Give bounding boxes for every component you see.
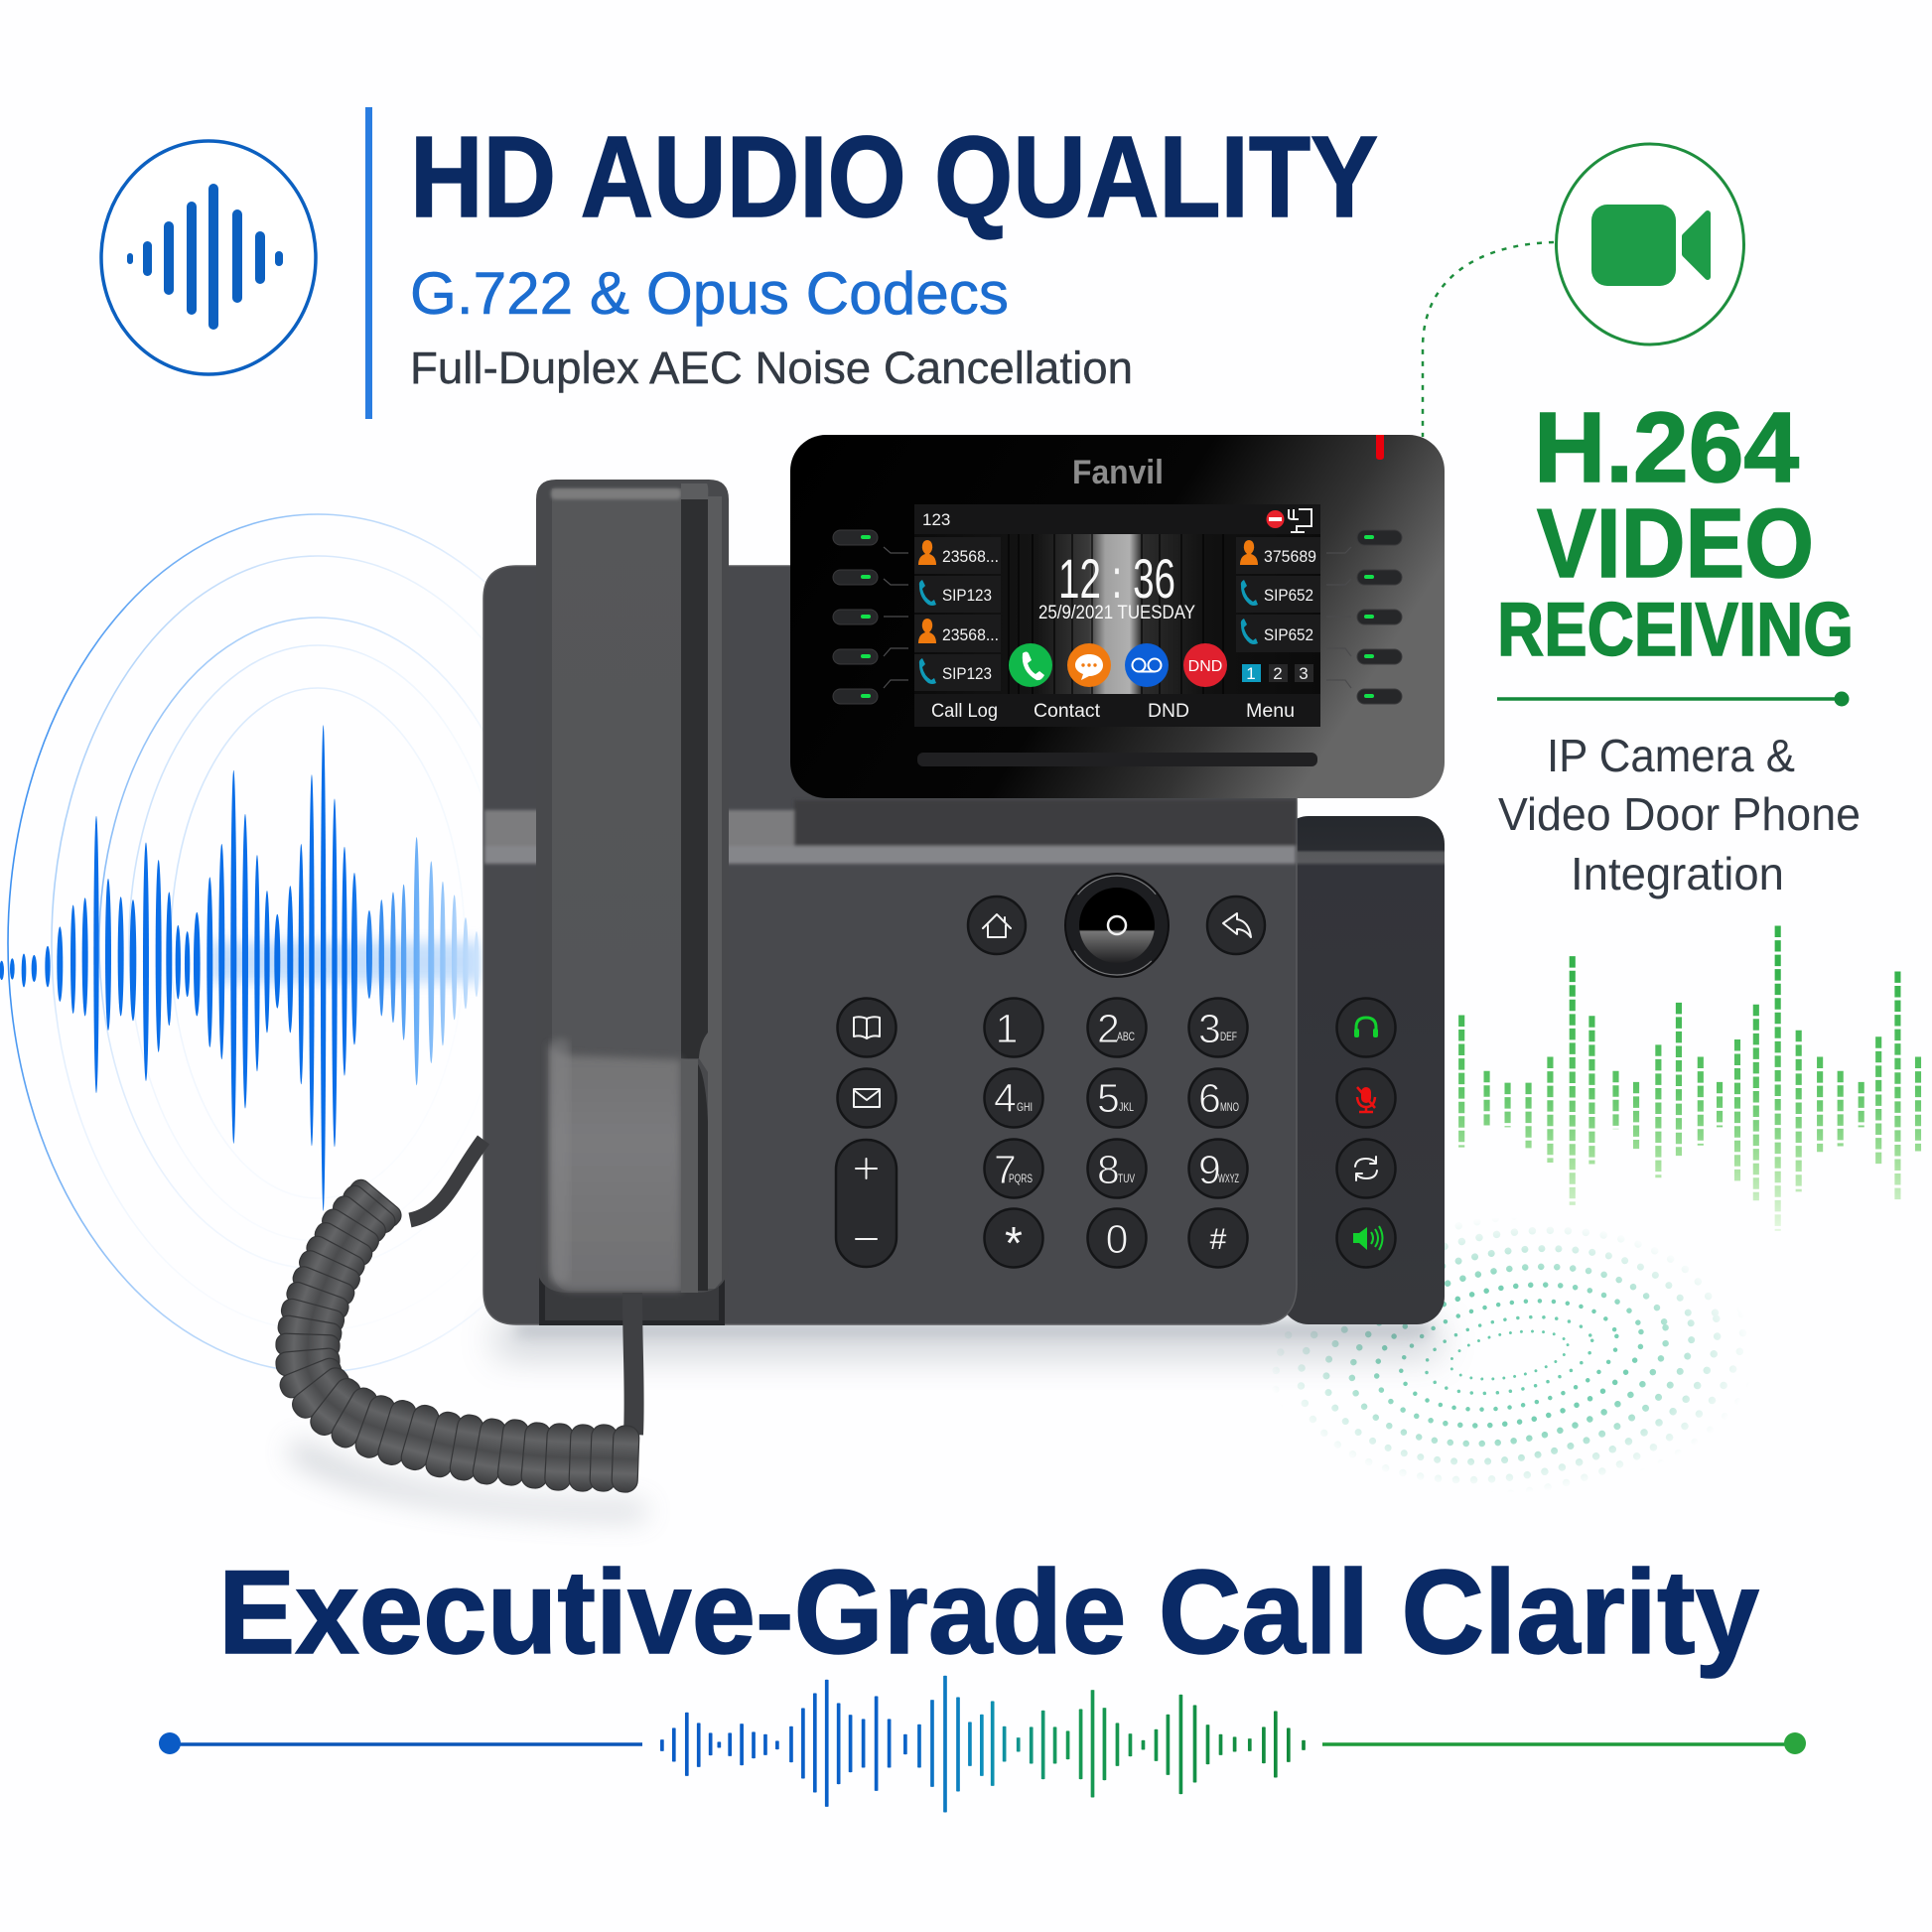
button: home (968, 897, 1026, 954)
button: headset (1336, 999, 1396, 1056)
left contact cells: 23568... (942, 547, 999, 566)
halftone dot field (1274, 1223, 1743, 1486)
dial keypad: PQRS (1009, 1172, 1033, 1185)
Fanvil logo: Fanvil (1072, 454, 1164, 491)
page tabs: 3 (1299, 664, 1309, 683)
handset cradle (539, 1261, 725, 1325)
handset (536, 480, 729, 1293)
heading block: HD audio: Full-Duplex AEC Noise Cancellation (410, 343, 1133, 393)
dial keypad: GHI (1017, 1100, 1033, 1114)
button: mute mic (1336, 1068, 1396, 1128)
button: transfer (1336, 1140, 1396, 1197)
dial keypad: * (1005, 1217, 1023, 1269)
app button: phone (1009, 643, 1052, 687)
dotted connector to video icon (1423, 242, 1554, 437)
status bar (914, 504, 1320, 534)
clock (1038, 547, 1195, 623)
heading block: HD audio: HD AUDIO QUALITY (410, 112, 1378, 241)
dial keypad: 2 (1097, 1006, 1120, 1051)
left contact cells: SIP123 (942, 664, 992, 683)
bottom blue line (159, 1732, 642, 1754)
softkey bar: Menu (1246, 701, 1295, 722)
phone base (483, 566, 1297, 1324)
dial keypad: 9 (1198, 1147, 1221, 1192)
navigation button (1065, 874, 1169, 977)
dial keypad: 0 (1106, 1216, 1128, 1262)
heading block: H.264 video: H.264 (1534, 392, 1799, 503)
screen housing (790, 435, 1445, 798)
button: contacts book (838, 999, 896, 1056)
right contact cells: 375689 (1264, 547, 1316, 566)
red indicator (1376, 435, 1384, 460)
left contact cells: 23568... (942, 625, 999, 644)
dial keypad: ABC (1117, 1030, 1135, 1043)
right contact cells: SIP652 (1264, 625, 1313, 644)
handset and wall cords (410, 1140, 634, 1435)
text block: video integration (1498, 730, 1861, 899)
dial keypad: TUV (1118, 1172, 1135, 1185)
page tabs: 2 (1273, 664, 1283, 683)
tagline: Executive-Grade Call Clarity (218, 1546, 1759, 1679)
dial keypad: 4 (994, 1075, 1017, 1121)
dial keypad: MNO (1220, 1100, 1239, 1114)
softkey bar (914, 694, 1320, 727)
icon: video camera circle (1557, 144, 1743, 345)
text block: video integration: Video Door Phone (1498, 788, 1861, 840)
bottom green line (1322, 1732, 1806, 1754)
right contact cells: SIP652 (1264, 586, 1313, 605)
clock: 25/9/2021 TUESDAY (1038, 603, 1195, 623)
heading block: H.264 video: VIDEO (1537, 488, 1814, 598)
dial keypad: WXYZ (1218, 1172, 1239, 1185)
phone (275, 435, 1445, 1492)
softkey bar: Call Log (931, 701, 998, 722)
button: message envelope (838, 1068, 896, 1128)
dial keypad: JKL (1119, 1100, 1134, 1114)
clock: 12 : 36 (1058, 547, 1175, 610)
green rule with dot (1497, 691, 1849, 707)
icon: audio wave circle (101, 141, 316, 374)
dial keypad: # (1210, 1223, 1227, 1256)
page tabs (1242, 664, 1313, 683)
sound ripple arcs (7, 513, 485, 1371)
text block: video integration: Integration (1571, 848, 1784, 899)
phone right module (1281, 816, 1445, 1324)
heading block: HD audio: G.722 & Opus Codecs (410, 260, 1009, 327)
app button: DND (1183, 643, 1227, 687)
dial keypad: 1 (996, 1006, 1018, 1051)
grey ridge (484, 800, 1296, 864)
dial keypad: DEF (1220, 1030, 1237, 1043)
right contact cells (1236, 537, 1320, 652)
dial keypad: 5 (1097, 1075, 1120, 1121)
bottom mixed waveform (662, 1676, 1304, 1812)
blue vertical divider (365, 107, 372, 419)
button: speaker (1336, 1209, 1396, 1267)
green dashed audio waveform (1461, 926, 1918, 1231)
text block: video integration: IP Camera & (1547, 730, 1795, 781)
left contact cells: SIP123 (942, 586, 992, 605)
dial keypad: 6 (1198, 1075, 1221, 1121)
dial keypad: 8 (1097, 1147, 1120, 1192)
page tabs: 1 (1246, 664, 1256, 683)
left contact cells (914, 537, 1001, 691)
app button: message (1067, 643, 1111, 687)
volume rocker (836, 1140, 897, 1267)
dial keypad (985, 999, 1247, 1269)
light slot (917, 753, 1317, 766)
button: back (1207, 897, 1265, 954)
softkey bar: DND (1148, 701, 1189, 722)
heading block: HD audio (410, 112, 1378, 393)
dial keypad: 7 (994, 1147, 1017, 1192)
right line keys (1326, 530, 1402, 704)
phone LCD screen (914, 504, 1320, 727)
status bar: 123 (922, 510, 950, 529)
heading block: H.264 video: RECEIVING (1497, 588, 1854, 672)
dial keypad: 3 (1198, 1006, 1221, 1051)
blue audio waveform (0, 725, 480, 1211)
app button: voicemail (1125, 643, 1169, 687)
softkey bar: Contact (1034, 701, 1101, 722)
phone shadow (288, 1322, 1440, 1518)
app button: DND: DND (1188, 658, 1222, 675)
left line keys (833, 530, 908, 704)
heading block: H.264 video (1497, 392, 1854, 672)
coiled cord (275, 1175, 639, 1492)
